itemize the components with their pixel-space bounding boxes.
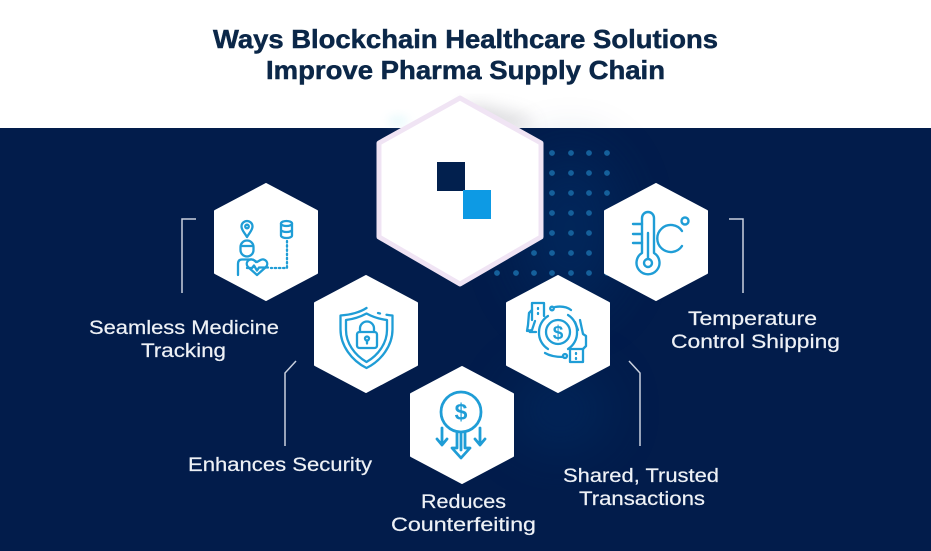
label: seamless medicine tracking: Tracking — [141, 341, 226, 362]
dot grid decoration — [494, 150, 610, 276]
label: reduces counterfeiting: Counterfeiting — [391, 515, 536, 536]
icon: medicine tracking — [238, 221, 292, 275]
title — [213, 24, 718, 85]
label: seamless medicine tracking — [89, 318, 279, 362]
icon: dollar with falling arrows: $ — [455, 399, 468, 425]
main hexagon shadow on white header — [455, 105, 535, 128]
bracket: temperature control shipping — [729, 219, 743, 293]
hexagon: enhances security — [315, 276, 417, 392]
title: Improve Pharma Supply Chain — [266, 55, 665, 85]
icon: thermometer celsius — [633, 212, 688, 274]
hexagon: shared, trusted transactions — [507, 276, 609, 392]
icon: hands exchanging dollar: $ — [553, 323, 564, 344]
label: temperature control shipping: Temperature — [688, 309, 817, 330]
bracket: enhances security — [285, 361, 296, 446]
title: Ways Blockchain Healthcare Solutions — [213, 24, 718, 54]
label: reduces counterfeiting: Reduces — [421, 492, 506, 513]
label: temperature control shipping: Control Shipping — [671, 332, 840, 353]
icon: logo squares — [437, 162, 491, 219]
bracket: seamless medicine tracking — [182, 219, 196, 293]
label: temperature control shipping — [671, 309, 840, 353]
label: enhances security: Enhances Security — [188, 455, 373, 476]
bracket: shared, trusted transactions — [629, 361, 640, 446]
hexagon: temperature control shipping — [605, 184, 707, 300]
label: shared, trusted transactions — [563, 466, 719, 510]
central logo hexagon — [379, 98, 541, 284]
icon: shield with padlock — [340, 308, 392, 368]
label: seamless medicine tracking: Seamless Medicine — [89, 318, 279, 339]
label: shared, trusted transactions: Transactions — [579, 489, 705, 510]
hexagon: seamless medicine tracking — [215, 184, 317, 300]
label: shared, trusted transactions: Shared, Trusted — [563, 466, 719, 487]
label: reduces counterfeiting — [391, 492, 536, 536]
hexagon: reduces counterfeiting — [411, 367, 513, 483]
dark background panel — [0, 117, 931, 551]
